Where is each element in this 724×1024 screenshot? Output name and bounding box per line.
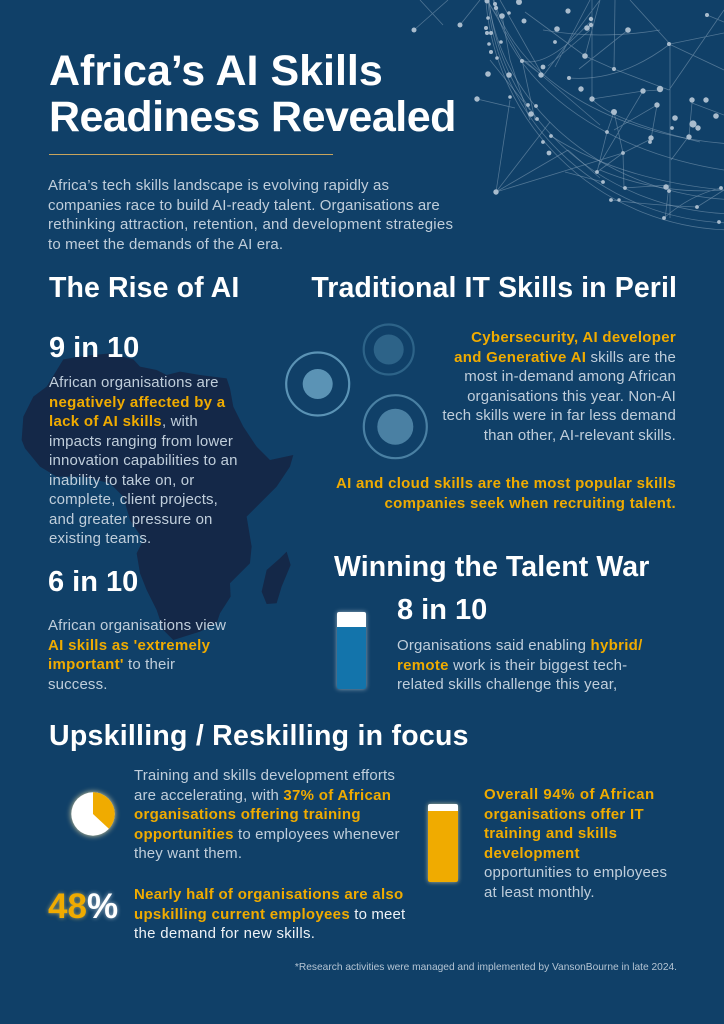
text: upskilling employees: the demand for new skills. [134, 925, 315, 942]
text: 94% offer IT training: opportunities to employees [484, 864, 667, 881]
text: 94% offer IT training: at least monthly. [484, 884, 595, 900]
text: in-demand skills: than other, AI-relevant skills. [484, 426, 676, 444]
text: training opportunities: are accelerating, with 37% of African [134, 786, 391, 804]
text: training opportunities: they want them. [134, 845, 242, 862]
text: lack of AI skills: lack of AI skills, with [49, 413, 198, 430]
text: lack of AI skills: inability to take on, or [49, 472, 194, 488]
callout: AI and cloud skills: companies seek when recruiting talent. [384, 494, 676, 512]
text: upskilling employees: upskilling current employees to meet [134, 906, 405, 922]
text: in-demand skills: organisations this year. Non-AI [467, 388, 676, 404]
title [49, 47, 456, 141]
text: in-demand skills [442, 329, 676, 444]
stat: 9 in 10: 9 in 10 [49, 332, 139, 364]
heading: Traditional IT Skills in Peril: Traditional IT Skills in Peril [311, 272, 677, 304]
text: training opportunities: organisations offering training [134, 806, 361, 823]
stat: 8 in 10: 8 in 10 [397, 594, 487, 626]
text: training opportunities: Training and skills development efforts [134, 767, 395, 784]
text: 94% offer IT training: Overall 94% of African [484, 786, 655, 803]
footnote: *Research activities were managed and implemented by VansonBourne in late 2024. [295, 962, 677, 973]
icon: concentric circles [285, 324, 428, 460]
text: AI skills extremely important: African organisations view [48, 617, 226, 634]
text: 94% offer IT training: organisations offer IT [484, 806, 644, 822]
text: lack of AI skills: impacts ranging from lower [49, 432, 233, 450]
callout: AI and cloud skills: AI and cloud skills are the most popular skills [336, 475, 676, 492]
icon: pie chart 37% [66, 788, 120, 840]
text: hybrid remote work: Organisations said enabling hybrid/ [397, 637, 643, 654]
text: lack of AI skills: complete, client projects, [49, 491, 218, 508]
text: AI skills extremely important: success. [48, 676, 108, 692]
text: lack of AI skills: innovation capabilities to an [49, 452, 238, 469]
stat: 6 in 10: 6 in 10 [48, 566, 138, 598]
text: lack of AI skills: African organisations are [49, 374, 219, 391]
text: 94% offer IT training: training and skills [484, 825, 617, 842]
text: in-demand skills: and Generative AI skills are the [454, 348, 676, 366]
title: Africa’s AI Skills [49, 47, 383, 95]
text: training opportunities: opportunities to employees whenever [134, 826, 400, 842]
Africa map silhouette [22, 354, 294, 640]
text: 94% offer IT training: development [484, 844, 580, 862]
text: AI skills extremely important: AI skills as 'extremely [48, 636, 210, 654]
intro text: Africa’s tech skills landscape is evolving rapidly as [48, 177, 389, 194]
text: upskilling employees: Nearly half of organisations are also [134, 886, 404, 903]
globe network graphic [412, 0, 724, 230]
text: lack of AI skills: and greater pressure on [49, 510, 213, 528]
text: training opportunities [134, 767, 400, 862]
text: lack of AI skills: existing teams. [49, 530, 151, 547]
icon: bar 94% [428, 804, 458, 882]
intro text: companies race to build AI-ready talent. Organisations are [48, 196, 440, 214]
intro text [48, 177, 453, 252]
text: in-demand skills: tech skills were in far less demand [442, 407, 676, 424]
text: upskilling employees [134, 886, 406, 942]
text: 94% offer IT training [484, 786, 667, 900]
text: AI skills extremely important [48, 617, 226, 692]
icon: bar 8 in 10 [337, 612, 366, 689]
text: hybrid remote work [397, 637, 643, 693]
text: hybrid remote work: related skills challenge this year, [397, 676, 617, 693]
text: AI skills extremely important: important' to their [48, 656, 175, 673]
heading: Winning the Talent War: Winning the Talent War [334, 551, 649, 583]
stat: 48%: 48% [48, 887, 118, 926]
title: Readiness Revealed [49, 93, 456, 141]
text: in-demand skills: Cybersecurity, AI developer [471, 329, 676, 346]
heading: The Rise of AI: The Rise of AI [49, 272, 239, 304]
heading: Upskilling / Reskilling in focus: Upskilling / Reskilling in focus [49, 720, 469, 752]
intro text: to meet the demands of the AI era. [48, 236, 283, 252]
callout: AI and cloud skills [336, 475, 676, 512]
text: lack of AI skills [49, 374, 238, 547]
text: in-demand skills: most in-demand among African [464, 368, 676, 385]
intro text: rethinking attraction, retention, and development strategies [48, 216, 453, 233]
text: lack of AI skills: negatively affected by a [49, 394, 225, 410]
text: hybrid remote work: remote work is their biggest tech- [397, 656, 627, 674]
